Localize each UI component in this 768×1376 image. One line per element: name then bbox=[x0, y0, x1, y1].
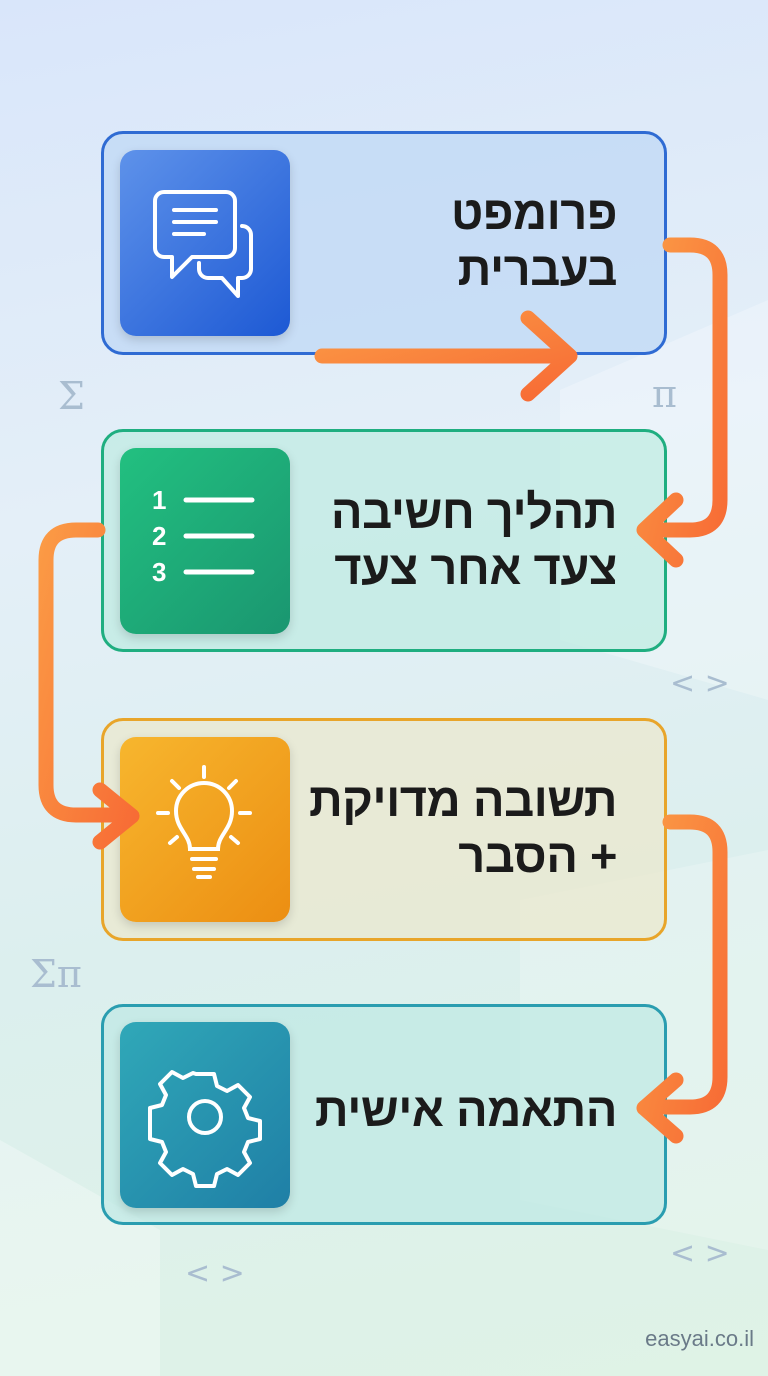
card 1 bbox=[101, 131, 667, 355]
text 3 bbox=[309, 773, 617, 882]
text 4: התאמה אישית bbox=[315, 1083, 617, 1136]
text: < > bbox=[670, 666, 730, 701]
icon tile: list: 3 bbox=[152, 557, 166, 587]
text: π bbox=[652, 372, 677, 416]
card 3 bbox=[101, 718, 667, 941]
math symbols: Σ bbox=[58, 374, 85, 418]
footer brand: easyai.co.il bbox=[645, 1326, 754, 1351]
text 3: תשובה מדויקת bbox=[309, 773, 617, 826]
icon tile: list: 2 bbox=[152, 521, 166, 551]
text 3: + הסבר bbox=[458, 829, 617, 882]
text: Σπ bbox=[30, 952, 82, 996]
icon tile: chat bbox=[120, 150, 290, 336]
icon tile: list: 1 bbox=[152, 485, 166, 515]
text 1 bbox=[451, 186, 617, 295]
icon tile: bulb bbox=[120, 737, 290, 922]
text 1: בעברית bbox=[458, 242, 617, 295]
text 1: פרומפט bbox=[451, 186, 617, 239]
card 4 bbox=[101, 1004, 667, 1225]
text 2: תהליך חשיבה bbox=[331, 485, 617, 538]
text: < > bbox=[670, 1236, 730, 1271]
arrow 4 bbox=[644, 822, 720, 1136]
icon tile: list bbox=[120, 448, 290, 634]
card 2 bbox=[101, 429, 667, 652]
arrow 3 bbox=[46, 530, 132, 842]
text 2: צעד אחר צעד bbox=[334, 541, 617, 594]
arrow 2 bbox=[644, 245, 720, 560]
text: < > bbox=[185, 1256, 245, 1291]
icon tile: gear bbox=[120, 1022, 290, 1208]
text 2 bbox=[331, 485, 617, 594]
arrow 1 bbox=[322, 318, 570, 394]
